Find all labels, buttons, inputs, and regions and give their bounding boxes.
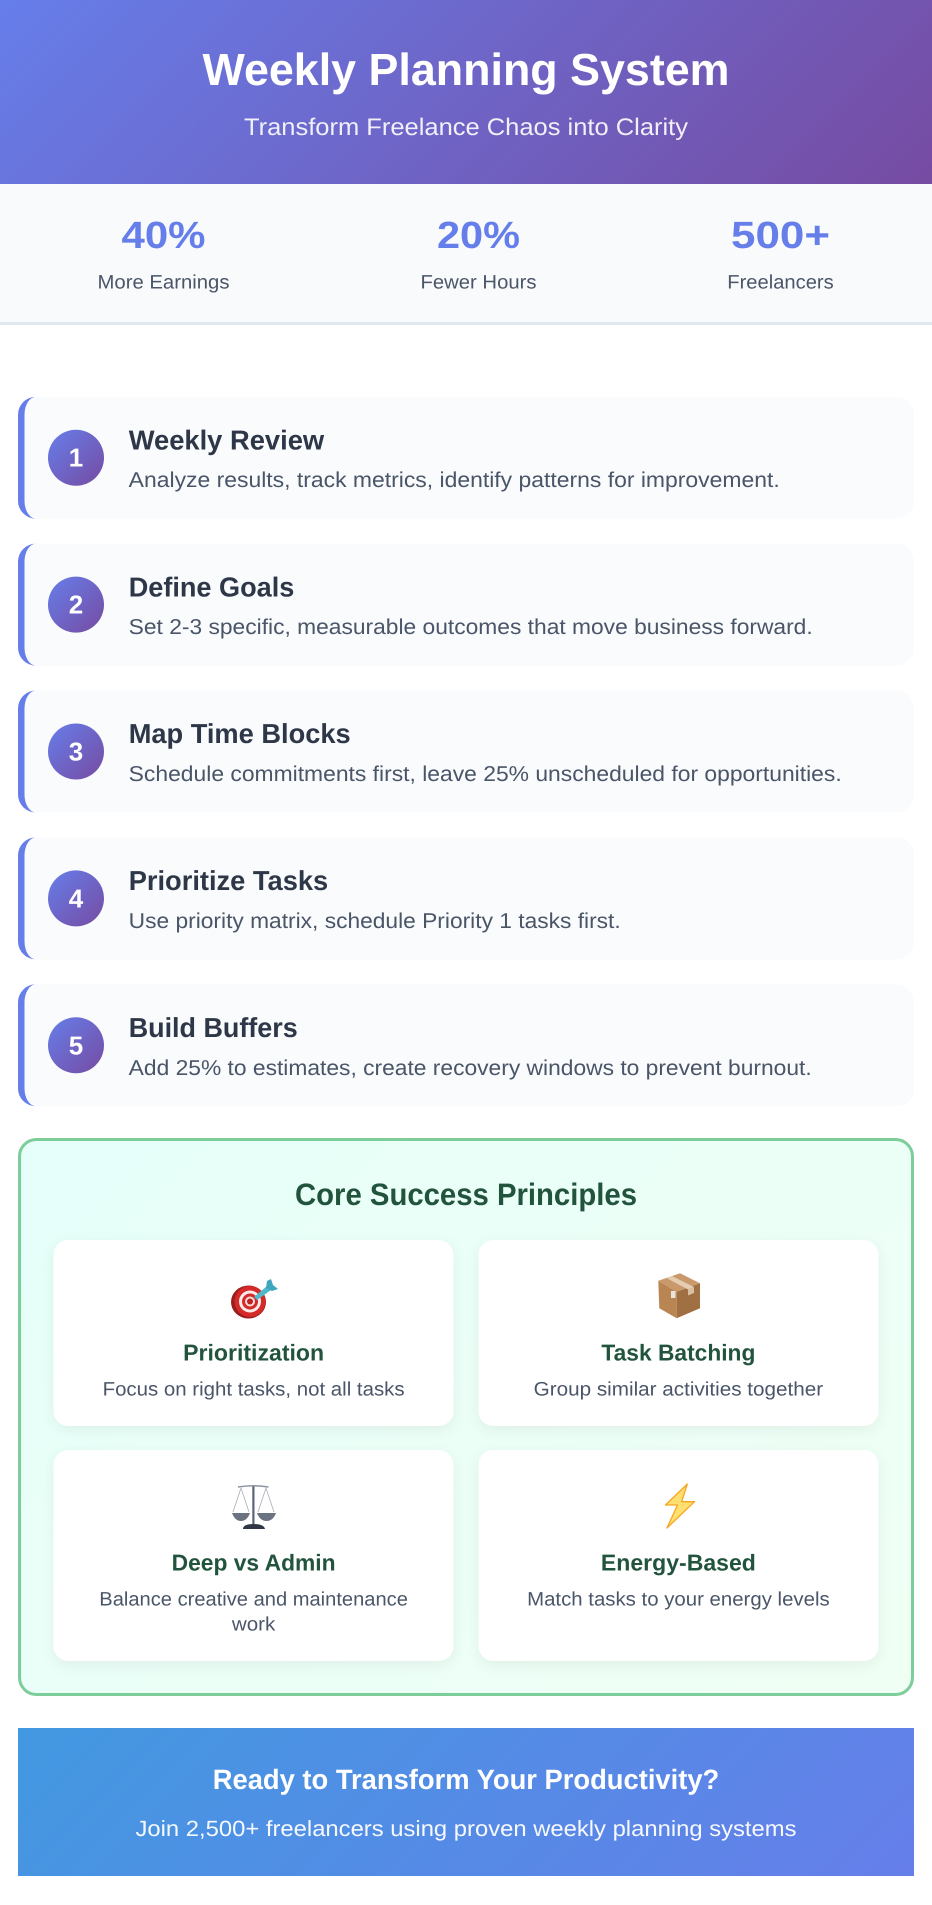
step 2: define goals: Define Goals <box>129 571 294 602</box>
step 5: build buffers <box>18 984 914 1106</box>
stats bar <box>0 184 932 325</box>
step 1: weekly review <box>18 397 914 519</box>
title: Weekly Planning System <box>202 44 730 95</box>
step 4: prioritize tasks: Use priority matrix, schedule Priority 1 tasks first. <box>129 909 621 933</box>
step 1: weekly review: Analyze results, track metrics, identify patterns for improvement. <box>129 468 780 492</box>
card: deep vs admin <box>54 1450 454 1661</box>
stat: more earnings <box>98 215 230 294</box>
cta heading: Ready to Transform Your Productivity? <box>213 1764 719 1795</box>
icon: balance scale <box>232 1485 276 1529</box>
stat: fewer hours: 20% <box>437 215 520 257</box>
icon: lightning bolt <box>666 1484 694 1528</box>
step 4: prioritize tasks: Prioritize Tasks <box>129 865 328 896</box>
step 5: build buffers: 5 <box>69 1030 83 1060</box>
stat: fewer hours <box>420 215 537 294</box>
stat: freelancers <box>727 215 834 294</box>
card: deep vs admin: work <box>231 1614 276 1636</box>
panel: core success principles <box>20 1140 912 1694</box>
call to action banner <box>18 1728 914 1876</box>
stat: freelancers: 500+ <box>731 215 830 257</box>
card description: Match tasks to your energy levels <box>527 1589 830 1611</box>
icon: target with dart <box>231 1279 278 1318</box>
step 2: define goals: 2 <box>69 590 83 620</box>
step 3: map time blocks <box>18 690 914 812</box>
step 3: map time blocks: Map Time Blocks <box>129 718 351 749</box>
step 4: prioritize tasks: 4 <box>69 883 84 913</box>
step 2: define goals <box>18 544 914 666</box>
stat: more earnings: More Earnings <box>98 272 230 294</box>
step 5: build buffers: Add 25% to estimates, create recovery windows to prevent burnout. <box>129 1056 812 1080</box>
stat: fewer hours: Fewer Hours <box>420 272 537 294</box>
step 2: define goals: Set 2-3 specific, measurable outcomes that move business forward. <box>129 615 813 639</box>
card heading: Deep vs Admin <box>172 1550 336 1576</box>
icon: package box <box>658 1273 700 1318</box>
subtitle: Transform Freelance Chaos into Clarity <box>244 114 688 141</box>
step 5: build buffers: Build Buffers <box>129 1012 298 1043</box>
card description: Group similar activities together <box>534 1379 824 1401</box>
card description: Focus on right tasks, not all tasks <box>103 1379 405 1401</box>
card heading: Task Batching <box>601 1340 755 1366</box>
panel heading: Core Success Principles <box>295 1177 637 1212</box>
stat: more earnings: 40% <box>122 215 206 257</box>
card heading: Energy-Based <box>601 1550 756 1576</box>
step 1: weekly review: Weekly Review <box>129 424 325 455</box>
card description: Balance creative and maintenance <box>99 1589 408 1611</box>
card: task batching <box>478 1240 878 1426</box>
card: energy-based <box>478 1450 878 1661</box>
step 3: map time blocks: 3 <box>69 736 83 766</box>
card: prioritization <box>54 1240 454 1426</box>
stat: freelancers: Freelancers <box>727 272 834 294</box>
step 4: prioritize tasks <box>18 837 914 959</box>
header banner <box>0 0 932 184</box>
card heading: Prioritization <box>183 1340 324 1366</box>
step 3: map time blocks: Schedule commitments first, leave 25% unscheduled for opportunities. <box>129 762 842 786</box>
cta text: Join 2,500+ freelancers using proven weekly planning systems <box>136 1816 796 1841</box>
step 1: weekly review: 1 <box>69 443 83 473</box>
